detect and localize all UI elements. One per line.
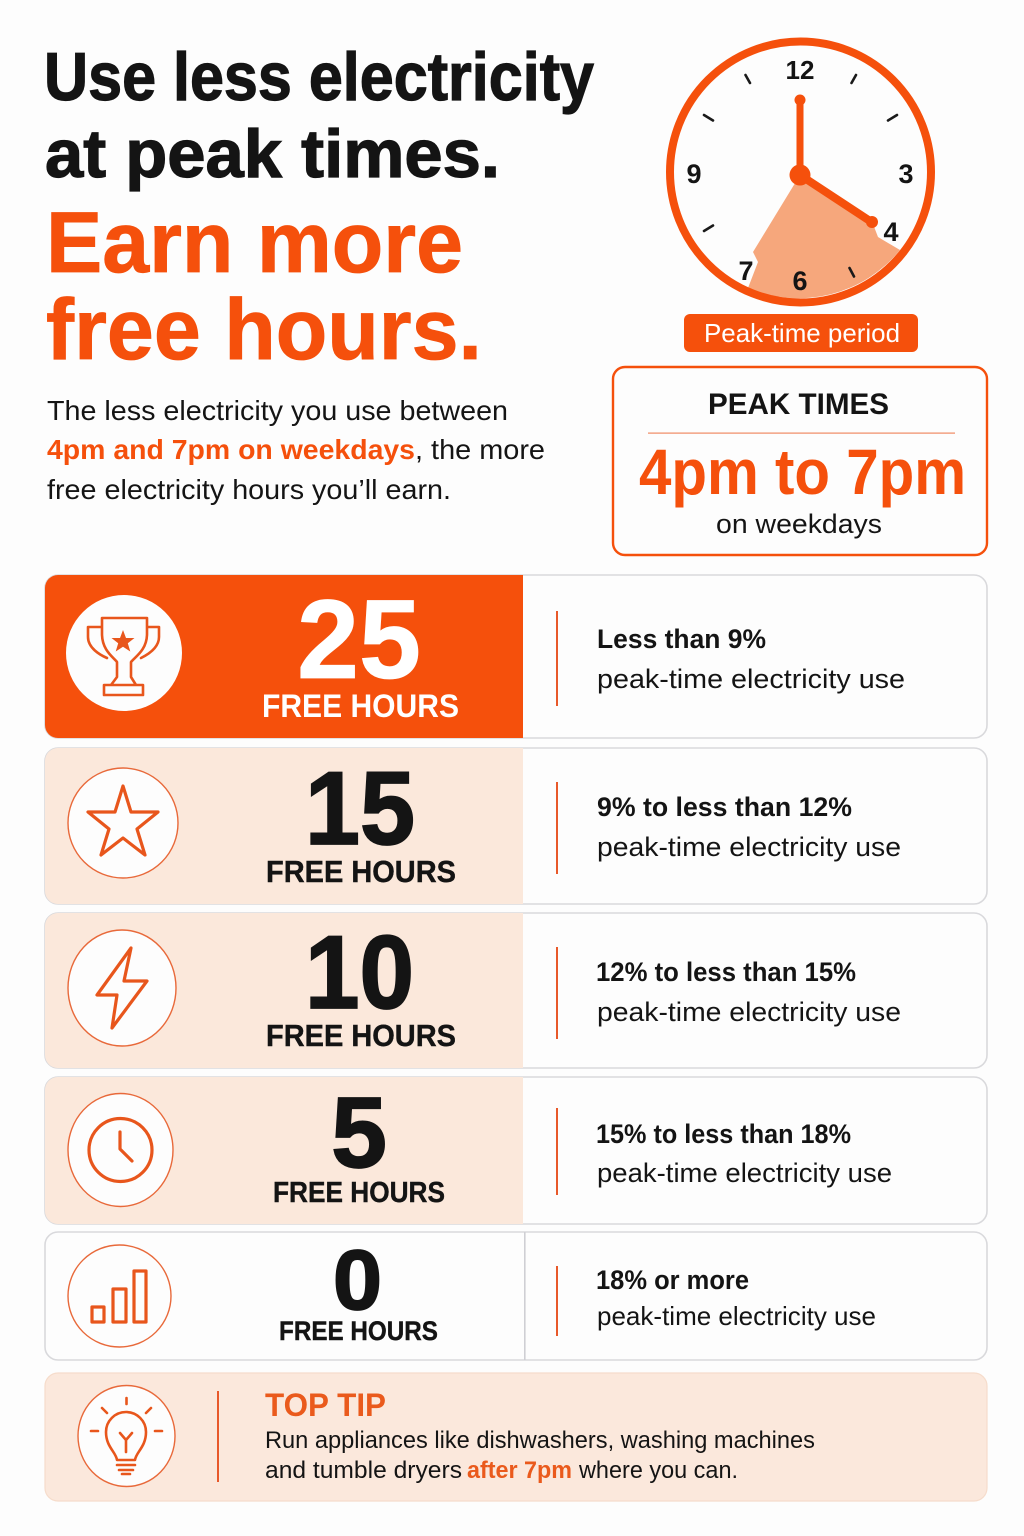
clock numbers	[686, 55, 914, 296]
description: peak-time electricity use	[597, 1301, 876, 1331]
value: 15	[305, 751, 415, 867]
peak-time label	[684, 314, 918, 352]
row: 0 free hours	[45, 1232, 987, 1360]
row: 5 free hours: FREE HOURS	[273, 1177, 445, 1209]
description: 12% to less than 15%	[596, 957, 856, 987]
value: 5	[331, 1077, 387, 1189]
clock	[670, 42, 931, 302]
description	[556, 1265, 876, 1336]
title	[44, 39, 594, 378]
clock ticks	[704, 75, 897, 276]
row: 5 free hours	[45, 1077, 987, 1224]
tip text: Run appliances like dishwashers, washing machines	[265, 1427, 815, 1454]
clock numbers: 3	[898, 159, 914, 189]
icon: star	[68, 768, 178, 878]
description: peak-time electricity use	[597, 664, 905, 694]
peak-time wedge	[748, 175, 900, 298]
peak-time label: Peak-time period	[704, 318, 900, 348]
row: 10 free hours	[45, 913, 987, 1068]
peak times box: 4pm to 7pm	[639, 436, 966, 508]
intro text: The less electricity you use between	[47, 395, 508, 426]
description: 9% to less than 12%	[597, 792, 852, 822]
tip text	[265, 1387, 815, 1484]
clock numbers: 9	[686, 159, 702, 189]
tip text: after 7pm	[467, 1457, 572, 1484]
description	[556, 611, 905, 706]
tip text: where you can.	[578, 1457, 738, 1484]
title: Use less electricity	[44, 39, 594, 115]
row: 10 free hours: FREE HOURS	[266, 1018, 456, 1053]
row: 0 free hours: FREE HOURS	[279, 1316, 438, 1346]
clock numbers: 4	[883, 217, 899, 247]
description: 18% or more	[596, 1265, 749, 1295]
clock ring	[670, 42, 931, 302]
title: Earn more	[46, 195, 463, 291]
clock numbers: 6	[792, 266, 808, 296]
description: Less than 9%	[597, 624, 766, 654]
description: peak-time electricity use	[597, 997, 901, 1027]
title: at peak times.	[45, 116, 500, 192]
icon: bar chart	[68, 1245, 171, 1347]
row: 25 free hours: FREE HOURS	[262, 688, 459, 724]
row: 15 free hours	[45, 748, 987, 904]
description	[556, 947, 901, 1039]
icon: trophy	[66, 595, 182, 711]
row: 15 free hours: FREE HOURS	[266, 854, 456, 889]
icon: light bulb	[78, 1386, 175, 1486]
clock numbers: 7	[738, 256, 754, 286]
intro text	[47, 395, 545, 505]
tip text: TOP TIP	[265, 1387, 386, 1423]
value: 0	[333, 1233, 382, 1327]
description	[556, 1108, 892, 1195]
description: peak-time electricity use	[597, 832, 901, 862]
clock hands	[790, 94, 878, 228]
title: free hours.	[46, 282, 482, 378]
peak times box	[613, 367, 987, 555]
panel: top tip	[45, 1373, 987, 1501]
intro text: free electricity hours you’ll earn.	[47, 474, 451, 505]
value: 25	[297, 577, 421, 702]
description: 15% to less than 18%	[596, 1119, 851, 1149]
icon: clock	[68, 1094, 173, 1206]
intro text: , the more	[415, 434, 545, 465]
tip text: and tumble dryers	[265, 1457, 462, 1484]
peak times box: PEAK TIMES	[708, 388, 889, 421]
icon: lightning bolt	[68, 930, 176, 1046]
peak times box: on weekdays	[716, 509, 882, 539]
description	[556, 782, 901, 874]
description: peak-time electricity use	[597, 1158, 892, 1188]
value: 10	[305, 915, 414, 1031]
intro text: 4pm and 7pm on weekdays	[47, 434, 415, 465]
row: 25 free hours	[45, 575, 987, 738]
clock numbers: 12	[786, 55, 814, 85]
